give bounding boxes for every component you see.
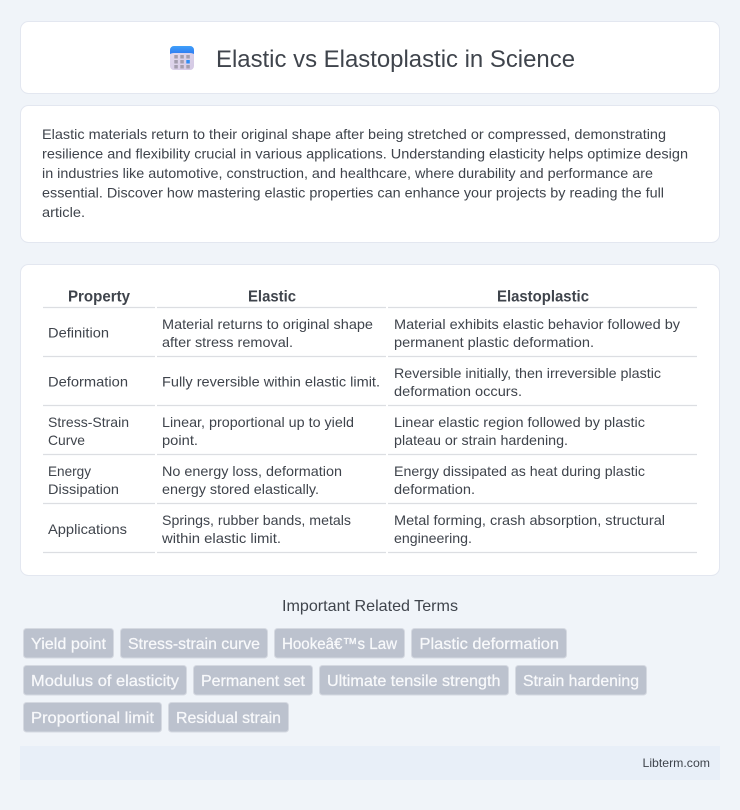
table row: applications: Applications bbox=[48, 521, 127, 537]
table row: applications: engineering. bbox=[394, 530, 472, 546]
tag: stress-strain curve bbox=[120, 628, 268, 658]
table row: energy dissipation bbox=[48, 463, 645, 497]
table header row: Elastic bbox=[248, 288, 296, 306]
footer band bbox=[20, 746, 720, 780]
table row: energy dissipation: Energy dissipated as heat during plastic bbox=[394, 463, 645, 479]
table header row: Elastoplastic bbox=[497, 288, 589, 306]
tag: permanent set bbox=[194, 666, 312, 695]
tag: plastic deformation bbox=[412, 628, 566, 658]
heading: important related terms: Important Related Terms bbox=[282, 598, 458, 615]
text block: introduction paragraph: Elastic materials return to their original shape after being stretched or compressed, demonstrating bbox=[42, 126, 666, 142]
table row: deformation: Deformation bbox=[48, 374, 128, 390]
table row: stress-strain curve: point. bbox=[162, 432, 198, 448]
table row: stress-strain curve bbox=[48, 414, 645, 448]
table row: stress-strain curve: plateau or strain hardening. bbox=[394, 432, 568, 448]
table row: definition: Material exhibits elastic behavior followed by bbox=[394, 316, 680, 332]
tag: permanent set: Permanent set bbox=[201, 673, 306, 690]
table row: definition: permanent plastic deformation. bbox=[394, 334, 594, 350]
table row: energy dissipation: deformation. bbox=[394, 481, 475, 497]
icon: calendar bbox=[170, 46, 194, 70]
table row: deformation: deformation occurs. bbox=[394, 383, 522, 399]
table row: stress-strain curve: Stress-Strain bbox=[48, 414, 129, 430]
table row: applications: Springs, rubber bands, metals bbox=[162, 512, 351, 528]
table row: applications: Metal forming, crash absorption, structural bbox=[394, 512, 665, 528]
table row: deformation bbox=[48, 365, 661, 399]
text block: introduction paragraph: resilience and flexibility crucial in various applications. Understanding elasticity helps optimize design bbox=[42, 146, 688, 162]
tag: hooke's law: Hookeâ€™s Law bbox=[282, 636, 397, 653]
table row: definition: after stress removal. bbox=[162, 334, 293, 350]
footer credit: Libterm.com bbox=[642, 756, 710, 770]
tag: yield point bbox=[24, 628, 114, 658]
tag: hooke's law bbox=[274, 628, 404, 658]
table row: stress-strain curve: Linear elastic region followed by plastic bbox=[394, 414, 645, 430]
table header row bbox=[68, 288, 589, 306]
panel: introduction bbox=[20, 106, 720, 242]
tag: ultimate tensile strength bbox=[320, 666, 508, 695]
table header row: Property bbox=[68, 288, 130, 306]
text block: introduction paragraph: essential. Discover how mastering elastic properties can enhance your projects by reading the full bbox=[42, 184, 664, 200]
tag: ultimate tensile strength: Ultimate tensile strength bbox=[327, 673, 500, 690]
tag: strain hardening: Strain hardening bbox=[523, 673, 639, 690]
table row: definition: Definition bbox=[48, 324, 109, 340]
table row: energy dissipation: Energy bbox=[48, 463, 91, 479]
tag: proportional limit bbox=[24, 702, 162, 732]
table row: applications: within elastic limit. bbox=[161, 530, 281, 546]
table row: definition: Material returns to original shape bbox=[162, 316, 373, 332]
tag: strain hardening bbox=[516, 666, 646, 695]
text block: introduction paragraph bbox=[42, 126, 688, 220]
table row: energy dissipation: Dissipation bbox=[48, 481, 119, 497]
table row: stress-strain curve: Curve bbox=[48, 432, 85, 448]
tag: proportional limit: Proportional limit bbox=[31, 710, 155, 727]
title: Elastic vs Elastoplastic in Science bbox=[216, 46, 575, 73]
table row: applications bbox=[48, 512, 665, 546]
table row: energy dissipation: No energy loss, deformation bbox=[162, 463, 342, 479]
table row: energy dissipation: energy stored elastically. bbox=[162, 481, 319, 497]
table row: stress-strain curve: Linear, proportional up to yield bbox=[162, 414, 354, 430]
table row: deformation: Reversible initially, then irreversible plastic bbox=[394, 365, 661, 381]
panel: related term tags bbox=[24, 628, 646, 732]
tag: residual strain: Residual strain bbox=[176, 710, 281, 727]
tag: residual strain bbox=[168, 702, 288, 732]
tag: modulus of elasticity: Modulus of elasticity bbox=[31, 673, 179, 690]
tag: yield point: Yield point bbox=[31, 636, 107, 653]
tag: stress-strain curve: Stress-strain curve bbox=[128, 636, 260, 653]
text block: introduction paragraph: article. bbox=[42, 204, 85, 220]
table row: definition bbox=[48, 316, 680, 350]
tag: modulus of elasticity bbox=[24, 666, 186, 695]
table row: deformation: Fully reversible within elastic limit. bbox=[162, 374, 380, 390]
panel: comparison table bbox=[20, 264, 720, 576]
panel: title header bbox=[20, 22, 720, 94]
tag: plastic deformation: Plastic deformation bbox=[420, 636, 559, 653]
text block: introduction paragraph: in industries like automotive, construction, and healthcare, where durability and performance are bbox=[42, 165, 653, 181]
